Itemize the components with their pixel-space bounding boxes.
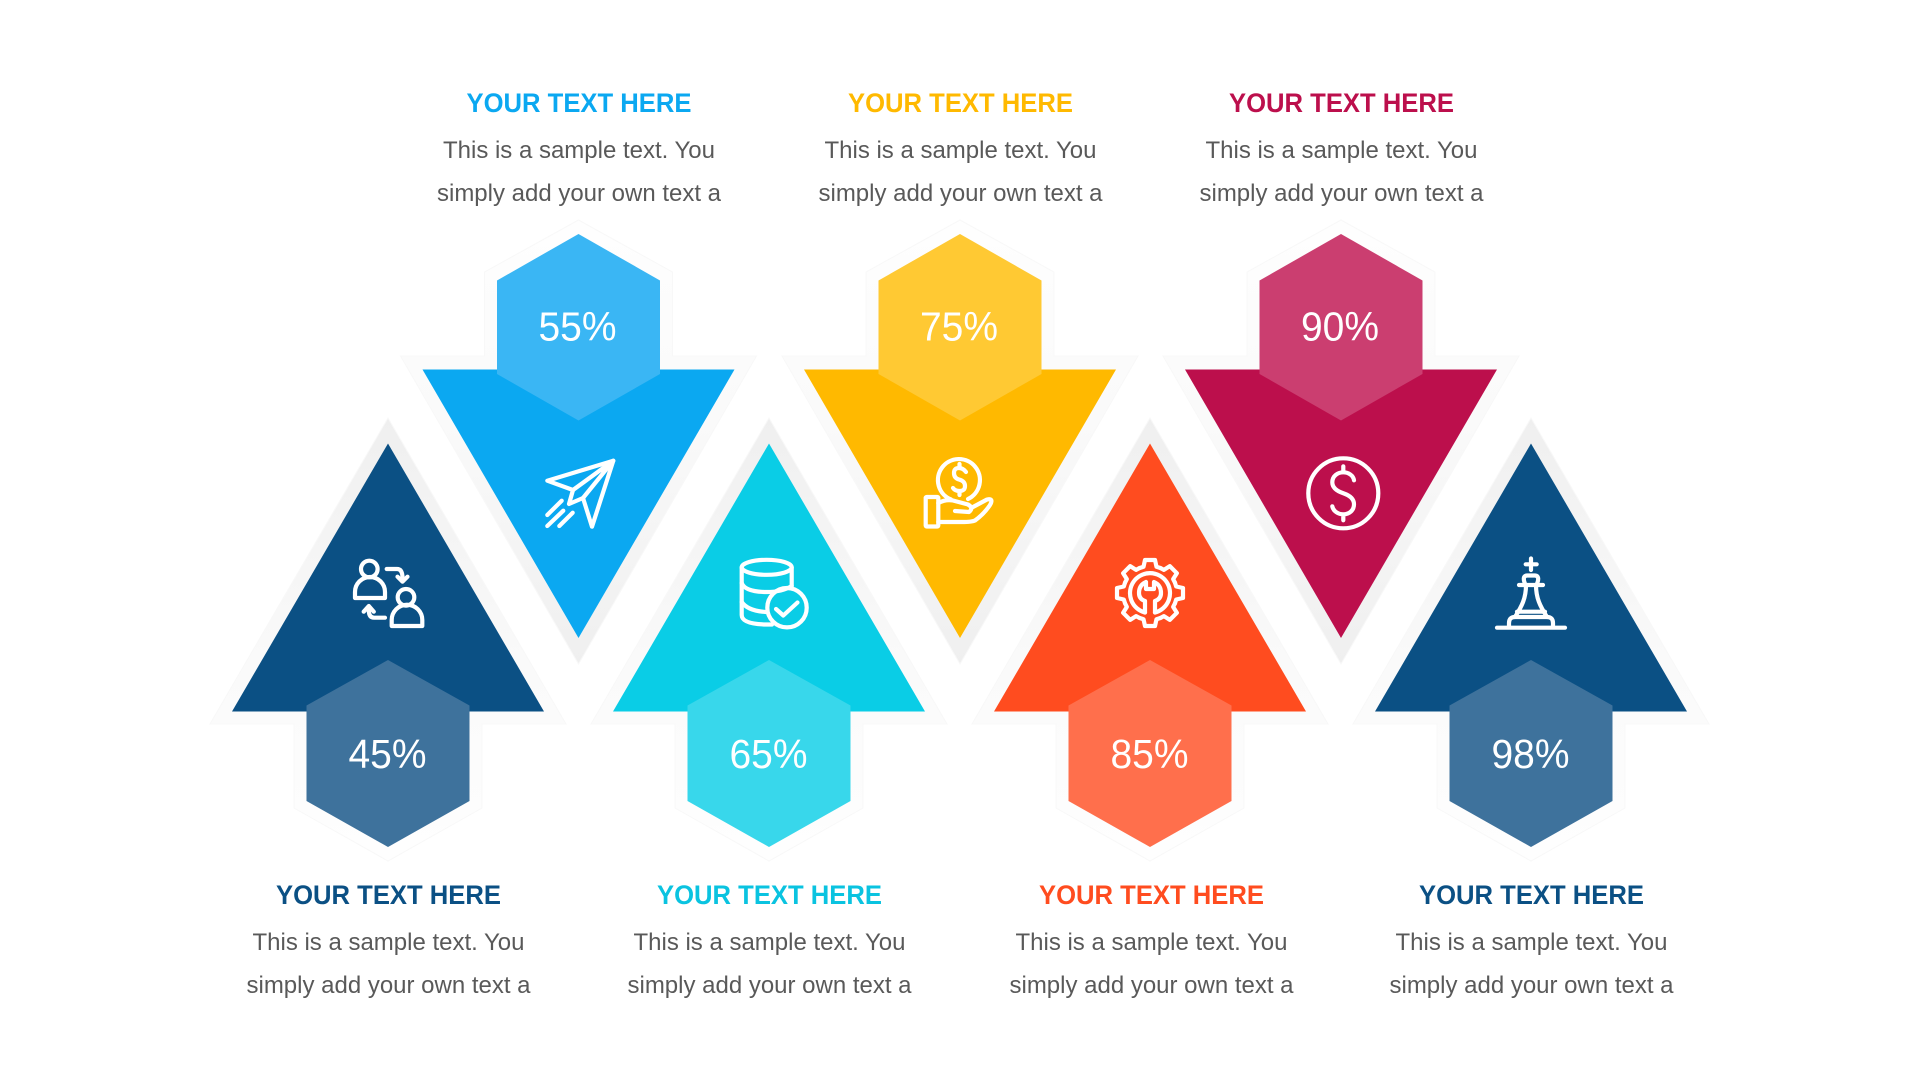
arrow: 90% crimson down xyxy=(1163,220,1519,664)
text block: bottom 98% xyxy=(1390,880,1674,999)
text block: bottom 45%: YOUR TEXT HERE xyxy=(276,880,501,910)
text block: top 75%: simply add your own text a xyxy=(818,180,1103,207)
icon: hand holding coin xyxy=(926,459,991,526)
text block: top 55%: simply add your own text a xyxy=(437,180,722,207)
text block: top 55%: This is a sample text. You xyxy=(443,137,715,164)
text block: bottom 85%: This is a sample text. You xyxy=(1016,929,1288,956)
text block: bottom 85%: simply add your own text a xyxy=(1010,972,1294,999)
text block: bottom 85% xyxy=(1010,880,1294,999)
text block: bottom 98%: simply add your own text a xyxy=(1390,972,1674,999)
text block: bottom 98%: YOUR TEXT HERE xyxy=(1419,880,1644,910)
text block: bottom 65% xyxy=(628,880,912,999)
text block: bottom 65%: YOUR TEXT HERE xyxy=(657,880,882,910)
text block: top 90%: This is a sample text. You xyxy=(1206,137,1478,164)
arrow: 85% orange up: 85% xyxy=(1110,731,1188,777)
text block: bottom 98%: This is a sample text. You xyxy=(1396,929,1668,956)
icon: dollar coin xyxy=(1308,458,1378,528)
text block: top 55%: YOUR TEXT HERE xyxy=(466,88,692,118)
text block: top 90%: YOUR TEXT HERE xyxy=(1229,88,1454,118)
arrow: 55% blue down xyxy=(400,220,756,664)
icon: people exchange xyxy=(355,561,422,626)
arrow: 65% cyan up xyxy=(591,418,947,861)
arrow: 90% crimson down: 90% xyxy=(1301,304,1379,350)
icon: database check xyxy=(742,560,807,627)
text block: bottom 45% xyxy=(246,880,531,999)
text block: bottom 85%: YOUR TEXT HERE xyxy=(1039,880,1264,910)
arrow: 75% yellow down xyxy=(782,220,1138,664)
icon: paper plane xyxy=(547,461,613,527)
text block: top 90%: simply add your own text a xyxy=(1200,180,1484,207)
icon: chess king xyxy=(1497,558,1565,628)
text block: top 55% xyxy=(437,88,722,207)
arrow: 55% blue down: 55% xyxy=(538,304,616,350)
text block: bottom 65%: This is a sample text. You xyxy=(634,929,906,956)
arrow: 45% navy up xyxy=(210,418,566,861)
text block: bottom 45%: simply add your own text a xyxy=(246,972,531,999)
text block: top 75% xyxy=(818,88,1103,207)
text block: bottom 45%: This is a sample text. You xyxy=(252,929,524,956)
text block: bottom 65%: simply add your own text a xyxy=(628,972,912,999)
arrow: 98% navy up: 98% xyxy=(1492,731,1570,777)
arrow: 85% orange up xyxy=(972,418,1328,861)
text block: top 75%: YOUR TEXT HERE xyxy=(848,88,1073,118)
text block: top 75%: This is a sample text. You xyxy=(824,137,1096,164)
text block: top 90% xyxy=(1200,88,1484,207)
arrow: 65% cyan up: 65% xyxy=(730,731,808,777)
icon: gear with wrench xyxy=(1117,560,1183,626)
arrow: 45% navy up: 45% xyxy=(348,731,426,777)
arrow: 98% navy up xyxy=(1353,418,1709,861)
arrow: 75% yellow down: 75% xyxy=(920,304,998,350)
